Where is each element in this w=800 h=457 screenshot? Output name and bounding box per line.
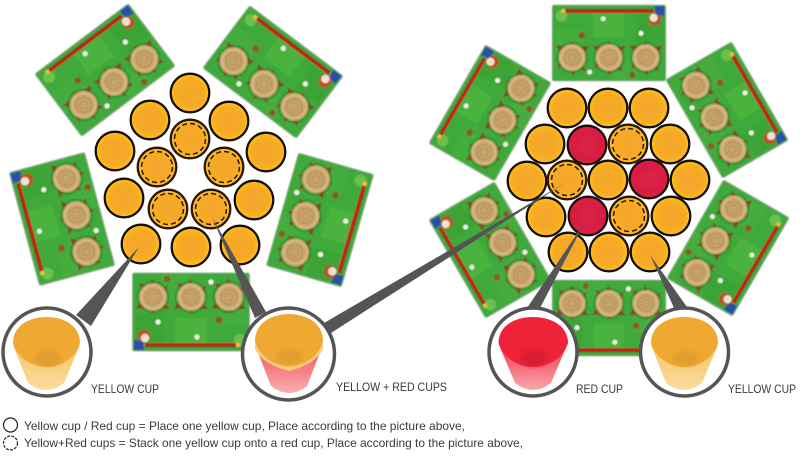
card: top bbox=[552, 5, 666, 81]
legend icon: dashed circle bbox=[4, 436, 18, 450]
callout: yellow + red cups bbox=[242, 308, 334, 400]
legend bbox=[4, 418, 523, 450]
arrow: right stacked cup bbox=[324, 183, 565, 333]
callout pointers bbox=[76, 183, 687, 333]
arrow: right yellow cup bbox=[650, 255, 687, 308]
arrow: left stacked cup bbox=[212, 217, 266, 318]
legend icon: solid circle bbox=[4, 418, 18, 432]
label: red cup: RED CUP bbox=[576, 383, 623, 396]
left group: player cards bbox=[9, 4, 374, 351]
card: lower right bbox=[667, 180, 789, 316]
right group: player cards bbox=[429, 5, 789, 356]
arrow: red cup bbox=[527, 222, 585, 310]
callout: yellow cup, right bbox=[640, 308, 728, 396]
label: yellow + red cups: YELLOW + RED CUPS bbox=[336, 381, 447, 394]
legend text: single cup: Yellow cup / Red cup = Place one yellow cup, Place according to the picture above, bbox=[24, 419, 465, 433]
legend text: stacked cups: Yellow+Red cups = Stack one yellow cup onto a red cup, Place according to the picture above, bbox=[24, 436, 523, 450]
card: upper right bbox=[666, 42, 788, 178]
card: bottom bbox=[552, 280, 666, 356]
left cup arrangement bbox=[96, 74, 285, 266]
card: right bbox=[266, 153, 374, 287]
arrow: left yellow cup bbox=[76, 247, 139, 326]
card: left bbox=[9, 152, 115, 286]
card: bottom bbox=[132, 273, 250, 351]
card: lower left bbox=[429, 182, 551, 318]
callout: yellow cup, left bbox=[3, 308, 91, 396]
right cup arrangement bbox=[508, 89, 709, 271]
card: upper left bbox=[35, 4, 175, 136]
label: yellow cup left: YELLOW CUP bbox=[91, 383, 159, 396]
callout: red cup bbox=[489, 308, 577, 396]
card: upper left bbox=[429, 45, 551, 181]
card: upper right bbox=[203, 6, 343, 138]
